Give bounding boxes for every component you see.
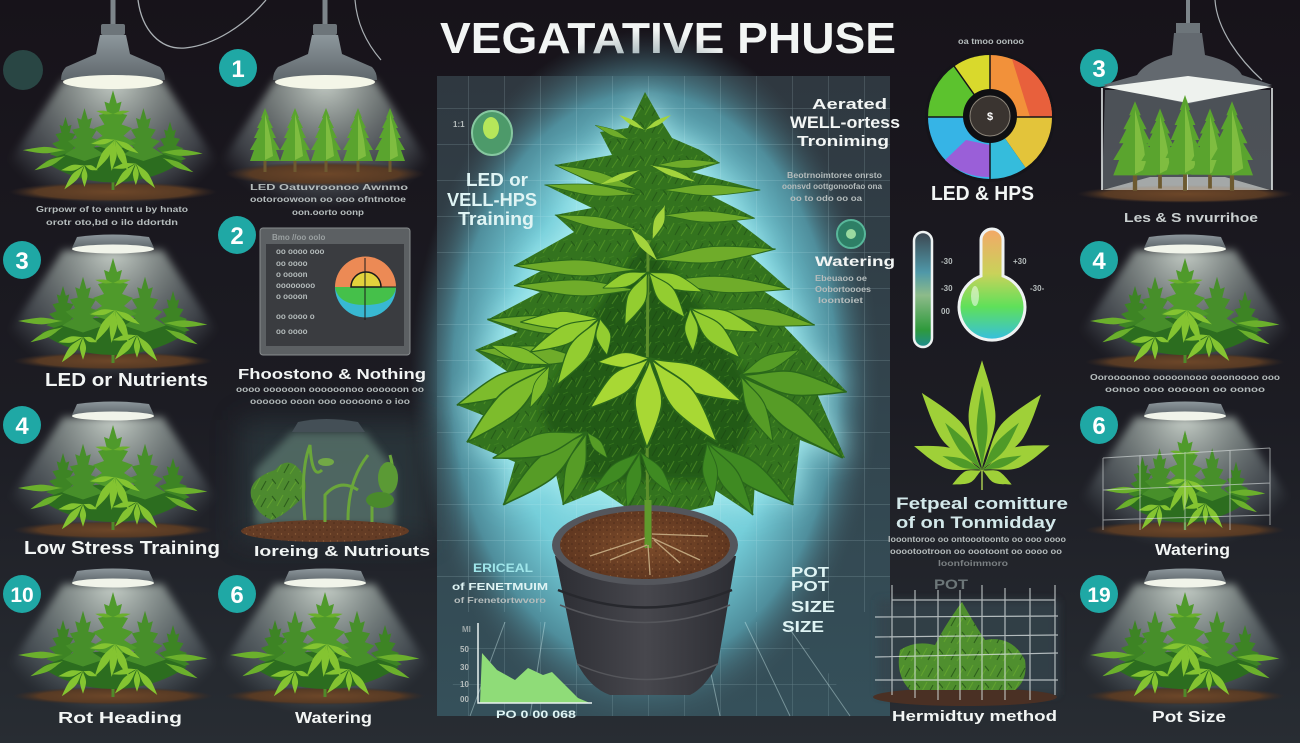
icon: badge 3 right: 3: [1092, 56, 1106, 83]
icon: badge 19 right: 19: [1087, 584, 1111, 607]
icon: badge 1: [219, 49, 257, 87]
panel: enclosed grow box: [1077, 0, 1293, 203]
text block: watering notes: Ebeuaoo oe: [815, 274, 868, 283]
panel: right step 6 Watering: Watering: [1155, 542, 1230, 559]
label: Pot Size Size: [782, 564, 835, 636]
bottom-left growth chart: 10: [460, 680, 469, 689]
label: Aerated Well-ortess Troniming: Troniming: [797, 133, 889, 150]
panel: step 3 LED or Nutrients: LED or Nutrients: [45, 370, 208, 390]
label: Les and S nvurrihoe: Les & S nvurrihoe: [1124, 210, 1258, 225]
panel: step top-left lamp and plants: Grrpowr of to enntrt u by hnato: [36, 205, 188, 214]
icon: badge 10: 10: [10, 584, 34, 607]
plant pot: [552, 500, 738, 695]
label: Ericeal of Fenetmuim: ERICEAL: [473, 561, 533, 575]
central cannabis plant: [453, 92, 851, 530]
panel: step 10 Rot Heading: [5, 568, 221, 727]
text block: nutrient notes: oooooo ooon ooo ooooono o ioo: [250, 397, 410, 406]
text block: aerated notes: Beotrnoimtoree onrsto: [787, 171, 882, 180]
panel: nutrient dashboard card: oooooooo: [276, 281, 315, 290]
icon: badge 6 right: [1080, 406, 1118, 444]
panel: nutrient dashboard card: o oooon: [276, 270, 308, 279]
panel: nutrient dashboard card: oo oooo: [276, 327, 308, 336]
label: Pot Size Size: SIZE: [791, 599, 835, 616]
icon: green bulb badge: 1:1: [453, 120, 465, 129]
panel: right step 4: oonoo ooo ooooon oo oonoo: [1105, 385, 1265, 394]
panel: step 3 LED or Nutrients: [5, 234, 221, 390]
panel: nutrient dashboard card: Bmo //oo oolo: [272, 233, 325, 242]
icon: thermometer gauge: 00: [941, 307, 950, 316]
icon: badge 2: [218, 216, 256, 254]
label: Watering: Watering: [815, 253, 895, 269]
panel: step 4 Low Stress Training: [5, 402, 221, 558]
plant label: LED or Well-HPS Training: LED or: [466, 170, 528, 190]
text block: aerated notes: oo to odo oo oa: [790, 194, 863, 203]
panel: step 1 seedling row: [217, 0, 433, 217]
panel: step top-left lamp and plants: orotr oto,bd o ilo ddortdn: [46, 218, 178, 227]
panel: right step 19 Pot Size: Pot Size: [1152, 709, 1226, 726]
icon: badge 6: 6: [230, 582, 244, 609]
text block: aerated notes: oonsvd oottgonoofao ona: [782, 182, 883, 191]
label: Fetpeal comitture of on Tonmidday: Fetpeal comitture: [896, 494, 1068, 513]
text block: nutrient notes: oooo oooooon oooooonoo oooooon oo: [236, 385, 424, 394]
icon: badge 10: [3, 575, 41, 613]
plant label: LED or Well-HPS Training: [447, 170, 537, 229]
panel: step 6 Watering: [217, 568, 433, 727]
label: Ericeal of Fenetmuim: [452, 561, 548, 605]
plant label: LED or Well-HPS Training: VELL-HPS: [447, 190, 537, 210]
panel: right step 19 Pot Size: [1077, 568, 1293, 726]
icon: colour wheel LED and HPS: [925, 37, 1055, 182]
icon: colour wheel LED and HPS: $: [987, 111, 993, 123]
icon: badge 1: 1: [231, 56, 245, 83]
icon: watering badge: [837, 220, 865, 248]
icon: badge 4 right: 4: [1092, 248, 1106, 275]
label: Ericeal of Fenetmuim: of FENETMUIM: [452, 582, 548, 593]
label: Fhoostono and Nothing: Fhoostono & Nothing: [238, 366, 426, 383]
label: Pot Size Size: SIZE: [782, 619, 824, 636]
panel: nutrient dashboard card: o oooon: [276, 292, 308, 301]
panel: nutrient dashboard card: oo oooo: [276, 259, 308, 268]
icon: thermometer gauge: [914, 232, 953, 347]
text block: watering notes: [815, 274, 872, 305]
panel: nutrient dashboard card: [260, 228, 410, 355]
text block: humidity notes: Ioonfoimmoro: [938, 559, 1008, 568]
panel: step 1 seedling row: ootoroowoon oo ooo ofntnotoe: [250, 195, 407, 204]
bottom-left growth chart: 30: [460, 663, 469, 672]
plant label: LED or Well-HPS Training: Training: [458, 209, 534, 229]
panel: Hermidtuy method cage: Hermidtuy method: [892, 708, 1057, 725]
panel: step 1 seedling row: LED Oatuvroonoo Awnmo: [250, 183, 408, 192]
icon: badge 2: 2: [230, 223, 244, 250]
bottom-left growth chart: PO 0 00 068: [496, 709, 576, 721]
label: Pot Size Size: POT: [791, 578, 829, 595]
panel: Hermidtuy method cage: [873, 576, 1058, 725]
icon: colour wheel LED and HPS: oa tmoo oonoo: [958, 37, 1024, 46]
text block: aerated notes: [782, 171, 883, 203]
panel: step 10 Rot Heading: Rot Heading: [58, 710, 182, 727]
icon: thermometer gauge: -30: [941, 284, 953, 293]
icon: badge 4: [3, 406, 41, 444]
bottom-left growth chart: Ml: [462, 625, 471, 634]
panel: step 6 Watering: Watering: [295, 710, 372, 727]
text block: watering notes: Ioontoiet: [818, 296, 863, 305]
label: Aerated Well-ortess Troniming: Aerated: [812, 96, 887, 113]
icon: badge 6 right: 6: [1092, 413, 1106, 440]
icon: badge 4: 4: [15, 413, 29, 440]
panel: Hermidtuy method cage: POT: [934, 576, 969, 592]
panel: right step 6 Watering: [1077, 402, 1293, 559]
bottom-left growth chart: 00: [460, 695, 469, 704]
text block: watering notes: Oobortoooes: [815, 285, 872, 294]
panel: Ioreing and Nutriouts: Ioreing & Nutriouts: [254, 543, 430, 560]
title: VEGATATIVE PHUSE: [440, 14, 896, 63]
icon: green bulb badge: [453, 111, 512, 155]
icon: badge 3 right: [1080, 49, 1118, 87]
label: Ericeal of Fenetmuim: of Frenetortwvoro: [454, 596, 546, 605]
icon: flask gauge: +30: [1013, 257, 1027, 266]
icon: flask gauge: [959, 229, 1045, 340]
bottom-left growth chart: [460, 623, 592, 721]
text block: humidity notes: [888, 535, 1066, 568]
panel: step 4 Low Stress Training: Low Stress Training: [24, 538, 220, 558]
decorative teal dot: [3, 50, 43, 90]
bottom-left growth chart: 50: [460, 645, 469, 654]
icon: flask gauge: -30-: [1030, 284, 1045, 293]
label: LED and HPS: LED & HPS: [931, 183, 1034, 205]
label: Fetpeal comitture of on Tonmidday: of on Tonmidday: [896, 513, 1057, 532]
text block: nutrient notes: [236, 385, 424, 406]
panel: step top-left lamp and plants: [5, 0, 266, 227]
panel: nutrient dashboard card: oo oooo o: [276, 312, 315, 321]
panel: right step 4: Ooroooonoo ooooonooo ooonoooo ooo: [1090, 373, 1280, 382]
icon: badge 3: [3, 241, 41, 279]
label: Fetpeal comitture of on Tonmidday: [896, 494, 1068, 532]
panel: central plant grid backdrop: [400, 30, 890, 716]
label: Aerated Well-ortess Troniming: [790, 96, 900, 150]
icon: badge 4 right: [1080, 241, 1118, 279]
text block: humidity notes: ooootootroon oo oootoont oo oooo oo: [890, 547, 1062, 556]
panel: step 1 seedling row: oon.oorto oonp: [292, 208, 364, 217]
icon: badge 6: [218, 575, 256, 613]
icon: thermometer gauge: -30: [941, 257, 953, 266]
panel: nutrient dashboard card: oo oooo ooo: [276, 247, 325, 256]
label: Aerated Well-ortess Troniming: WELL-ortess: [790, 113, 900, 132]
panel: right step 4: [1077, 234, 1293, 394]
icon: cannabis leaf: [911, 360, 1053, 490]
panel: Ioreing and Nutriouts: [240, 419, 430, 560]
icon: badge 19 right: [1080, 575, 1118, 613]
icon: badge 3: 3: [15, 248, 29, 275]
text block: humidity notes: Iooontoroo oo ontoootoonto oo ooo oooo: [888, 535, 1066, 544]
label: Pot Size Size: POT: [791, 564, 829, 581]
